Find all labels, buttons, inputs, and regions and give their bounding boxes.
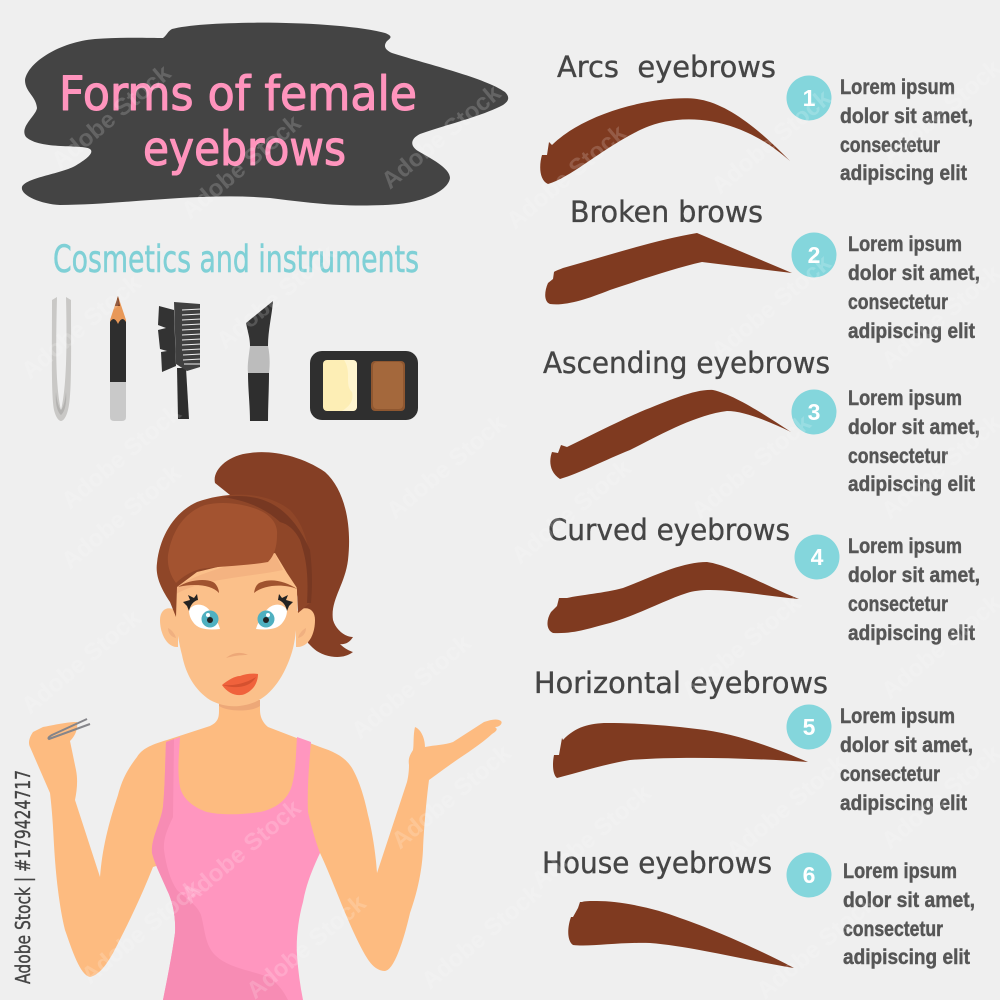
icon: tweezers bbox=[52, 297, 71, 421]
description 1: Lorem ipsum bbox=[840, 75, 955, 99]
section 4: curved eyebrows bbox=[547, 513, 980, 645]
tank top shading bbox=[152, 739, 288, 1000]
description 6: consectetur bbox=[843, 917, 944, 941]
watermark: adobe stock pattern: Adobe Stock bbox=[77, 874, 207, 990]
watermark: adobe stock pattern: Adobe Stock bbox=[347, 629, 477, 745]
number badge 2: 2 bbox=[808, 242, 820, 268]
icon: brow comb and brush bbox=[158, 302, 201, 419]
section 4: curved eyebrows: Curved eyebrows bbox=[548, 513, 790, 547]
description 6: adipiscing elit bbox=[843, 945, 970, 969]
description 2: adipiscing elit bbox=[848, 319, 975, 343]
tank top bbox=[152, 737, 320, 1000]
watermark: adobe stock pattern: Adobe Stock bbox=[17, 269, 147, 385]
brow shape: broken bbox=[545, 233, 792, 304]
number badge 3: 3 bbox=[808, 399, 820, 425]
description 5: Lorem ipsum bbox=[840, 704, 955, 728]
description 2: consectetur bbox=[848, 290, 949, 314]
description 6: Lorem ipsum bbox=[843, 859, 957, 883]
section 2: broken brows bbox=[545, 195, 980, 343]
description 3 bbox=[848, 386, 980, 496]
icon: angled makeup brush bbox=[246, 301, 273, 421]
number badge 1: 1 bbox=[803, 85, 816, 111]
title panel: dark blob with title bbox=[22, 23, 508, 206]
number badge 6: 6 bbox=[803, 862, 815, 888]
section 1: arcs eyebrows bbox=[540, 50, 973, 185]
description 4: adipiscing elit bbox=[848, 621, 975, 645]
nose bbox=[226, 653, 248, 658]
number badge 5: 5 bbox=[803, 714, 816, 740]
watermark: adobe stock pattern: Adobe Stock bbox=[707, 249, 837, 365]
watermark: adobe stock pattern: Adobe Stock bbox=[387, 739, 517, 855]
description 5: consectetur bbox=[840, 762, 941, 786]
description 5 bbox=[840, 704, 973, 815]
description 1: dolor sit amet, bbox=[840, 104, 973, 128]
section 5: horizontal eyebrows: Horizontal eyebrows bbox=[534, 666, 828, 700]
number badge 5 bbox=[786, 704, 832, 750]
icon: eyebrow pencil bbox=[110, 296, 126, 421]
watermark: adobe stock pattern: Adobe Stock bbox=[707, 84, 837, 200]
description 2: dolor sit amet, bbox=[848, 261, 980, 285]
section 6: house eyebrows: House eyebrows bbox=[542, 846, 772, 880]
description 1 bbox=[840, 75, 973, 185]
watermark: adobe stock pattern: Adobe Stock bbox=[722, 749, 852, 865]
skin: neck, shoulders and arms bbox=[29, 700, 502, 977]
illustration: woman with tweezers bbox=[29, 452, 502, 1000]
left ear bbox=[160, 608, 178, 647]
number badge 4 bbox=[794, 534, 840, 580]
hair: side and band bbox=[157, 495, 311, 617]
description 1: consectetur bbox=[840, 133, 941, 157]
left eyebrow bbox=[178, 580, 219, 593]
forehead shadow bbox=[172, 548, 283, 594]
description 5: adipiscing elit bbox=[840, 791, 967, 815]
description 1: adipiscing elit bbox=[840, 161, 967, 185]
watermark: adobe stock pattern: Adobe Stock bbox=[17, 604, 147, 720]
brow shape: house bbox=[568, 901, 794, 968]
watermark: adobe stock pattern: Adobe Stock bbox=[417, 879, 547, 995]
face bbox=[174, 545, 297, 706]
section 2: broken brows: Broken brows bbox=[570, 195, 763, 229]
description 3: dolor sit amet, bbox=[848, 415, 980, 439]
watermark: adobe stock pattern: Adobe Stock bbox=[382, 409, 512, 525]
section 6: house eyebrows bbox=[542, 846, 975, 969]
watermark: adobe stock pattern: Adobe Stock bbox=[47, 59, 177, 175]
watermark: adobe stock pattern: Adobe Stock bbox=[177, 794, 307, 910]
section 3: ascending eyebrows bbox=[543, 346, 980, 496]
description 3: consectetur bbox=[848, 444, 949, 468]
number badge 2 bbox=[792, 232, 836, 278]
watermark: adobe stock pattern: Adobe Stock bbox=[212, 239, 342, 355]
watermark: adobe stock pattern: Adobe Stock bbox=[57, 459, 187, 575]
number badge 3 bbox=[792, 390, 836, 434]
watermark: adobe stock pattern: Adobe Stock bbox=[527, 779, 657, 895]
watermark: adobe stock pattern: Adobe Stock bbox=[687, 409, 817, 525]
section 1: arcs eyebrows: Arcs eyebrows bbox=[557, 50, 776, 84]
description 4: consectetur bbox=[848, 592, 949, 616]
tweezers in hand bbox=[48, 719, 90, 739]
hair: fringe bbox=[168, 503, 277, 583]
brow shape: horizontal bbox=[553, 723, 808, 778]
icon: eyeshadow palette bbox=[310, 351, 418, 420]
title panel: dark blob with title: Forms of female bbox=[59, 67, 417, 122]
brow shape: arcs bbox=[540, 98, 790, 184]
title panel: dark blob with title: eyebrows bbox=[143, 122, 346, 177]
watermark: adobe stock pattern: Adobe Stock bbox=[677, 589, 807, 705]
number badge 4: 4 bbox=[811, 544, 824, 570]
brow shape: curved bbox=[547, 562, 799, 633]
right ear bbox=[296, 608, 315, 647]
heading: cosmetics and instruments: Cosmetics and instruments bbox=[53, 238, 419, 281]
description 4: dolor sit amet, bbox=[848, 563, 980, 587]
description 3: adipiscing elit bbox=[848, 472, 975, 496]
stock id label: Adobe Stock | #179424717 bbox=[11, 770, 35, 984]
description 2 bbox=[848, 232, 980, 343]
watermark: adobe stock pattern: Adobe Stock bbox=[377, 79, 507, 195]
description 6 bbox=[843, 859, 975, 969]
ponytail bbox=[215, 452, 353, 657]
watermark: adobe stock pattern: Adobe Stock bbox=[502, 119, 632, 235]
section 3: ascending eyebrows: Ascending eyebrows bbox=[543, 346, 830, 380]
watermark: adobe stock pattern: Adobe Stock bbox=[507, 454, 637, 570]
number badge 6 bbox=[786, 852, 832, 898]
number badge 1 bbox=[786, 76, 832, 120]
right eyebrow bbox=[254, 580, 297, 593]
left eye bbox=[183, 594, 220, 629]
watermark: adobe stock pattern: Adobe Stock bbox=[177, 109, 307, 225]
description 5: dolor sit amet, bbox=[840, 733, 973, 757]
description 4 bbox=[848, 534, 980, 645]
description 3: Lorem ipsum bbox=[848, 386, 962, 410]
description 6: dolor sit amet, bbox=[843, 888, 975, 912]
lips bbox=[222, 674, 258, 695]
description 2: Lorem ipsum bbox=[848, 232, 962, 256]
brow shape: ascending bbox=[550, 390, 791, 479]
section 5: horizontal eyebrows bbox=[534, 666, 973, 815]
neck shadow bbox=[219, 700, 260, 710]
right eye bbox=[256, 594, 293, 629]
description 4: Lorem ipsum bbox=[848, 534, 962, 558]
watermark: adobe stock pattern: Adobe Stock bbox=[57, 399, 187, 515]
